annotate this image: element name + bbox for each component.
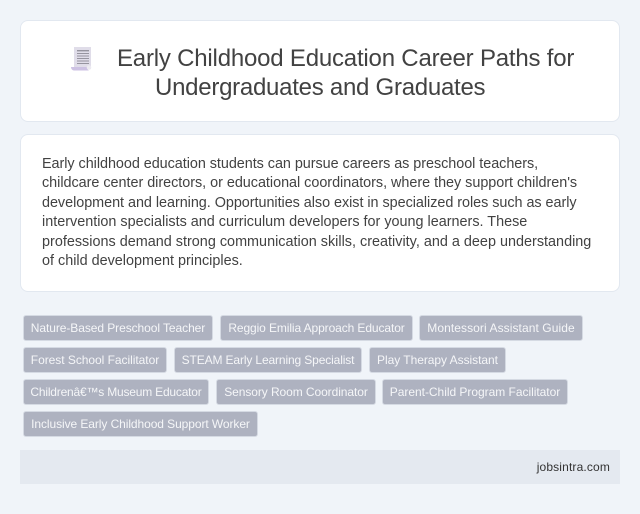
header panel: [20, 20, 620, 122]
tag list: Nature-Based Preschool Teacher: [31, 321, 205, 335]
description text: intervention specialists and curriculum developers for young learners. These: [42, 214, 527, 230]
footer bar: [20, 450, 620, 484]
description text: Early childhood education students can pursue careers as preschool teachers,: [42, 156, 538, 172]
icon: paper scroll: [71, 47, 92, 70]
description text: of child development principles.: [42, 253, 243, 269]
description text: [42, 156, 591, 269]
description text: professions demand strong communication skills, creativity, and a deep understanding: [42, 234, 591, 250]
title: Undergraduates and Graduates: [155, 74, 485, 101]
tag list: Parent-Child Program Facilitator: [390, 385, 560, 399]
description text: development and learning. Opportunities also exist in specialized roles such as early: [42, 195, 577, 211]
tag list: Sensory Room Coordinator: [224, 385, 368, 399]
tag list: [23, 315, 583, 437]
description panel: [20, 134, 620, 292]
tag list: Forest School Facilitator: [31, 353, 159, 367]
description text: childcare center directors, or educational coordinators, where they support children's: [42, 175, 577, 191]
tag list: Play Therapy Assistant: [377, 353, 498, 367]
tag list: Childrenâ€™s Museum Educator: [30, 385, 202, 399]
tag list: Inclusive Early Childhood Support Worker: [31, 417, 250, 431]
title: Early Childhood Education Career Paths for: [117, 45, 574, 72]
tag list: Montessori Assistant Guide: [427, 321, 575, 335]
footer source: jobsintra.com: [537, 460, 610, 474]
tag list: Reggio Emilia Approach Educator: [228, 321, 405, 335]
title: [117, 45, 574, 101]
tag list: STEAM Early Learning Specialist: [182, 353, 354, 367]
